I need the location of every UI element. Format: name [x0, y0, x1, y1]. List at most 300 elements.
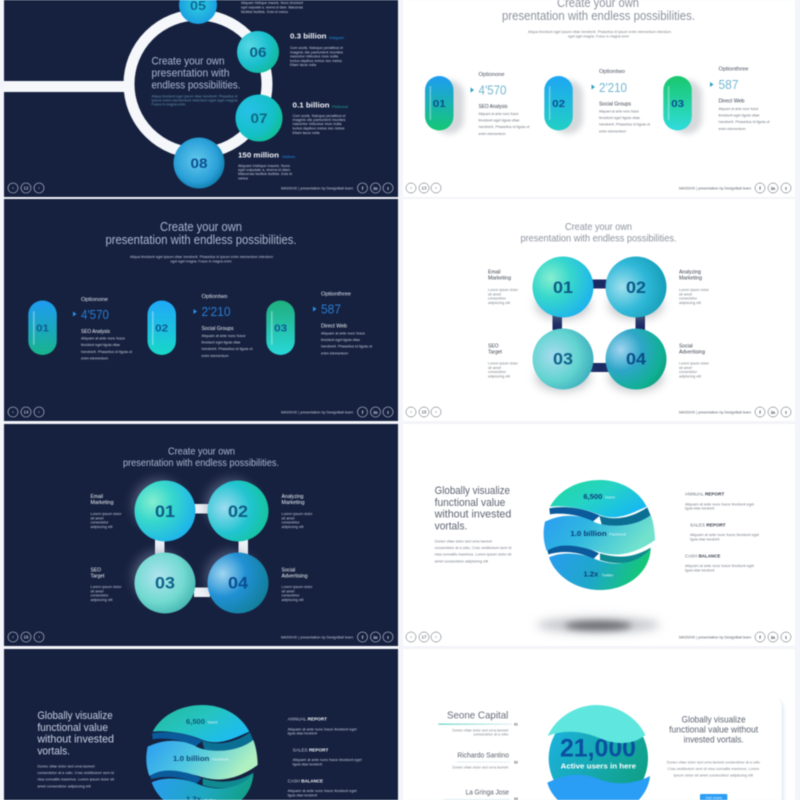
sales report: Aliquam at ante nunc fusce tincidunt eget — [293, 757, 363, 762]
card: invested vortals. — [684, 734, 744, 744]
label: social advertising: consectetur — [679, 370, 698, 374]
floating shadow — [537, 617, 660, 633]
card: functional value without — [669, 725, 759, 735]
card — [640, 697, 784, 800]
heading: functional value — [37, 722, 108, 734]
panel: wave globe (white) — [403, 424, 795, 646]
option three: tincidunt eget ligula vitae — [718, 113, 760, 117]
footer: navigation and social: › — [38, 410, 40, 414]
heading: presentation with endless possibilities. — [520, 232, 676, 244]
cash balance — [288, 778, 358, 797]
sub heading: Aliqua tincidunt eget ipsum vitae hendrerit. Phasellus id ipsum enim elementum interdum — [130, 255, 273, 259]
footer: navigation and social: MASSIVE | presentation by DesignBall team — [281, 636, 353, 640]
heading: functional value — [435, 497, 505, 509]
footer: navigation and social: t — [785, 186, 787, 191]
pill 01: 01 — [36, 324, 50, 334]
option one: Aliquam at ante nunc fusce — [478, 112, 518, 116]
cash balance: CASH BALANCE — [685, 553, 721, 559]
ring connector — [4, 15, 267, 153]
label: social advertising — [282, 568, 313, 602]
wave globe — [146, 705, 258, 800]
pill 03 — [266, 300, 295, 355]
entry: seone capital: Donec vitae dolor sed urna laoreet — [452, 727, 509, 732]
sales report — [293, 747, 363, 766]
body text: amet consectetur adipiscing elit — [37, 783, 92, 788]
label: analyzing marketing: Lorem ipsum dolor — [282, 512, 313, 516]
sales report: SALES REPORT — [690, 522, 726, 528]
heading — [106, 219, 296, 247]
annual report — [288, 717, 358, 736]
sphere 08: 08 — [190, 156, 208, 171]
option two: Aliquam at ante nunc fusce — [599, 110, 639, 114]
sphere 04: 04 — [626, 350, 647, 368]
footer: navigation and social: in — [771, 635, 775, 640]
annual report: ligula vitae hendrerit — [685, 506, 715, 511]
cash balance — [685, 553, 755, 572]
footer: navigation and social: f — [759, 186, 761, 191]
callout 05 text: eget vulputate a, viverra id diam. Maecenas — [241, 4, 303, 10]
ring description: Aliqua tincidunt eget ipsum vitae hendrerit. Phasellus id — [152, 94, 238, 98]
heading — [36, 710, 114, 758]
label: email marketing: Email — [90, 494, 103, 500]
ring heading: presentation with — [152, 68, 230, 80]
callout 05 text — [241, 0, 304, 14]
annual report: ANNUAL REPORT — [685, 492, 724, 498]
option two: Social Groups — [599, 102, 632, 108]
wave globe: Search — [208, 721, 218, 725]
entry: richardo santino — [452, 750, 518, 770]
label: seo target: Target — [488, 350, 503, 356]
body text: consectetur at a odio. Cras vestibulum sem id — [435, 545, 511, 550]
panel: pills (navy) — [4, 199, 398, 421]
heading — [123, 446, 279, 469]
wave sphere: Active users in here — [561, 761, 636, 770]
heading: Globally visualize — [435, 485, 510, 497]
body text: Donec vitae dolor sed urna laoreet — [37, 763, 95, 768]
callout 07: 0.1 billion — [292, 100, 330, 110]
annual report: ligula vitae hendrerit — [288, 731, 318, 736]
panel: active users (white) — [403, 649, 795, 800]
sphere 06 — [237, 31, 279, 73]
annual report: Aliquam at ante nunc fusce tincidunt eget — [288, 726, 358, 731]
callout 08: Visitors — [282, 155, 295, 159]
option three: 587 — [321, 302, 341, 316]
pill 03: 03 — [274, 324, 288, 334]
sphere 03 — [134, 552, 196, 614]
wave sphere: 21,000 — [560, 736, 636, 763]
entry: richardo santino: 02 — [514, 760, 518, 764]
sphere 02: 02 — [228, 503, 248, 521]
label: email marketing — [90, 494, 122, 529]
label: email marketing: sit amet — [90, 516, 104, 520]
heading: vortals. — [37, 746, 70, 758]
sphere 01: 01 — [553, 279, 573, 297]
pill 03 — [663, 76, 702, 134]
sphere 03: 03 — [155, 574, 175, 592]
footer: navigation and social: 15 — [421, 410, 427, 414]
footer: navigation and social: MASSIVE | presentation by DesignBall team — [679, 410, 751, 414]
label: seo target: consectetur — [488, 370, 507, 374]
option one: tincidunt eget ligula vitae — [81, 343, 120, 347]
entry: richardo santino: Donec vitae dolor sed urna laoreet — [452, 765, 509, 770]
wave globe: Facebook — [212, 758, 229, 762]
entry: seone capital — [438, 710, 518, 737]
pill 02 — [148, 300, 176, 355]
ring description: Fusce in magna enim — [152, 102, 186, 106]
option three: Direct Web — [321, 324, 347, 330]
callout 07: magnis dis parturient montes — [292, 117, 346, 122]
label: analyzing marketing: Marketing — [282, 500, 305, 506]
heading: Create your own — [160, 219, 242, 234]
footer: navigation and social: 13 — [421, 186, 427, 190]
heading — [520, 221, 676, 244]
option one: Optionone — [81, 297, 108, 303]
sphere glows — [132, 478, 257, 602]
ring heading — [152, 56, 240, 92]
sales report: SALES REPORT — [293, 747, 328, 753]
entry: seone capital: consectetur at a odio — [473, 732, 509, 737]
heading: Globally visualize — [37, 710, 113, 722]
heading: Create your own — [168, 446, 235, 458]
option three: Aliquam at ante nunc fusce — [321, 332, 365, 336]
sales report: ligula vitae hendrerit — [293, 761, 323, 766]
ring description: ipsum enim elementum interdum eget eget magna — [152, 98, 238, 102]
entry: la gringa jose — [443, 788, 518, 800]
footer: navigation and social: ‹ — [410, 410, 412, 414]
pill 02: 02 — [155, 324, 169, 334]
footer: navigation and social: 12 — [23, 186, 29, 190]
body text: nisa convallis maximus. Lorem ipsum dolor sit — [435, 552, 512, 557]
footer: navigation and social — [406, 632, 791, 642]
annual report: ANNUAL REPORT — [288, 717, 327, 723]
option three: enim elementum — [321, 352, 348, 356]
label: analyzing marketing: adipiscing elit — [679, 301, 702, 305]
body text: consectetur at a odio. Cras vestibulum sem id — [37, 770, 114, 775]
label: seo target — [90, 568, 122, 602]
connectors — [155, 504, 248, 597]
footer: navigation and social: t — [785, 410, 787, 415]
label: analyzing marketing: Analyzing — [282, 494, 304, 500]
option one: hendrerit. Phasellus id ligula ut — [478, 125, 530, 129]
footer: navigation and social: ‹ — [12, 410, 14, 414]
sphere 01 — [134, 480, 196, 542]
label: seo target: sit amet — [488, 366, 502, 370]
cash balance: Aliquam at ante nunc fusce tincidunt eget — [685, 563, 755, 568]
label: email marketing: Marketing — [488, 276, 511, 282]
option one: SEO Analysis — [81, 329, 110, 335]
pill 02: 02 — [552, 99, 566, 110]
footer: navigation and social: ‹ — [410, 186, 412, 190]
option three: Optionthree — [321, 292, 351, 298]
footer: navigation and social: f — [759, 410, 761, 415]
footer: navigation and social: in — [771, 186, 775, 191]
callout 07: nascetur ridiculus mus nulla — [292, 121, 342, 126]
heading — [434, 485, 511, 533]
option three — [710, 66, 770, 131]
label: social advertising: Lorem ipsum dolor — [679, 362, 710, 366]
label: analyzing marketing: Lorem ipsum dolor — [679, 288, 710, 292]
heading: presentation with endless possibilities. — [502, 8, 695, 23]
callout 08: varius — [238, 176, 248, 180]
option one: enim elementum — [81, 356, 108, 360]
footer: navigation and social: in — [374, 635, 378, 640]
callout 08 — [238, 150, 295, 180]
callout 07: Etiam lacus nulla — [292, 130, 320, 135]
label: analyzing marketing: sit amet — [282, 516, 295, 520]
sales report: ligula vitae hendrerit — [690, 536, 720, 541]
wave globe: 1.0 billion — [570, 531, 607, 538]
body text: nisa convallis maximus. Lorem ipsum dolor sit — [37, 777, 115, 782]
entry: seone capital: 01 — [514, 722, 518, 726]
footer: navigation and social: in — [771, 410, 775, 415]
sub heading: Aliqua tincidunt eget ipsum vitae hendrerit. Phasellus id ipsum enim elementum interdum — [528, 30, 671, 34]
footer: navigation and social: t — [387, 635, 389, 640]
panel: four spheres (white) — [403, 199, 795, 421]
label: analyzing marketing: consectetur — [679, 297, 698, 301]
option two: Aliquam at ante nunc fusce — [202, 334, 246, 338]
sphere 01 — [532, 256, 594, 318]
label: social advertising: Advertising — [282, 574, 308, 580]
label: email marketing: Marketing — [90, 500, 114, 506]
heading: without invested — [36, 734, 114, 746]
label: social advertising — [679, 344, 710, 378]
option one: hendrerit. Phasellus id ligula ut — [81, 350, 133, 354]
button: Get more — [705, 795, 723, 800]
footer: navigation and social: 17 — [421, 634, 427, 640]
footer: navigation and social: MASSIVE | presentation by DesignBall team — [281, 410, 353, 414]
panel: timeline ring (navy) — [4, 0, 398, 197]
option one: 4'570 — [81, 308, 109, 322]
footer: navigation and social: f — [759, 635, 761, 640]
wave globe: 1.0 billion — [173, 756, 209, 763]
heading — [502, 0, 695, 23]
footer: navigation and social: › — [38, 634, 40, 640]
wave globe: 6,500 — [583, 494, 602, 501]
option two: hendrerit. Phasellus id ligula ut — [202, 347, 253, 351]
option three: hendrerit. Phasellus id ligula ut — [321, 345, 373, 349]
sales report — [690, 522, 760, 541]
label: social advertising: Social — [282, 568, 295, 574]
sphere 08 — [174, 138, 224, 188]
sphere 06: 06 — [250, 45, 267, 60]
sphere 04 — [208, 552, 268, 614]
option one: Aliquam at ante nunc fusce — [81, 336, 125, 340]
body text — [37, 763, 115, 788]
callout 08: Maecenas facilisis facilisis. Duis id — [238, 171, 292, 176]
footer: navigation and social: › — [435, 186, 437, 190]
wave globe: 6,500 — [186, 719, 205, 726]
entry: richardo santino: Richardo Santino — [457, 750, 509, 759]
option two: enim elementum — [202, 354, 228, 358]
callout 06: Instagram — [329, 36, 344, 40]
label: seo target: adipiscing elit — [488, 374, 511, 378]
footer: navigation and social: ‹ — [410, 634, 412, 640]
label: seo target: SEO — [488, 344, 499, 350]
cash balance: ligula vitae hendrerit — [288, 792, 318, 797]
callout 06: 0.3 billion — [290, 32, 327, 40]
label: social advertising: Social — [679, 344, 693, 350]
sales report: Aliquam at ante nunc fusce tincidunt eget — [690, 532, 760, 537]
heading: presentation with endless possibilities. — [123, 457, 279, 469]
label: social advertising: consectetur — [282, 594, 300, 598]
body text — [435, 538, 512, 563]
footer: navigation and social: ‹ — [12, 186, 14, 190]
footer: navigation and social: f — [362, 635, 364, 640]
body text: Donec vitae dolor sed urna laoreet — [435, 538, 493, 543]
card: Cras vestibulum sem id nisa convallis maximus. Lorem — [667, 766, 760, 771]
label: analyzing marketing — [679, 270, 710, 305]
footer: navigation and social: › — [435, 634, 437, 640]
annual report — [685, 492, 755, 511]
label: email marketing: adipiscing elit — [90, 525, 113, 529]
callout 08: 150 million — [238, 150, 280, 160]
connectors — [552, 280, 645, 372]
option two: tincidunt eget ligula vitae — [599, 116, 640, 120]
label: email marketing: Lorem ipsum dolor — [90, 512, 122, 516]
option one: SEO Analysis — [478, 104, 508, 110]
label: email marketing — [488, 270, 519, 305]
pill 01: 01 — [433, 99, 446, 110]
callout 08: eget vulputate a, viverra id diam — [238, 167, 291, 172]
heading: Create your own — [565, 221, 632, 233]
footer: navigation and social: f — [362, 186, 364, 191]
label: seo target: SEO — [90, 568, 101, 574]
label: email marketing: Lorem ipsum dolor — [488, 288, 519, 292]
footer: navigation and social: MASSIVE | presentation by DesignBall team — [679, 636, 751, 640]
pill 02 — [544, 76, 583, 134]
sphere 02: 02 — [626, 279, 646, 297]
footer: navigation and social: ‹ — [12, 634, 14, 640]
footer: navigation and social: in — [374, 186, 378, 191]
sphere shadows — [536, 291, 663, 391]
label: analyzing marketing: adipiscing elit — [282, 525, 304, 529]
pill 03: 03 — [671, 99, 685, 110]
option two — [194, 294, 253, 358]
callout 05 text: facilisis facilisis. Duis id varius — [241, 9, 288, 14]
sphere 02 — [208, 480, 268, 542]
callout 06: Etiam lacus nulla — [290, 62, 317, 67]
annual report: Aliquam at ante nunc fusce tincidunt eget — [685, 501, 755, 506]
label: email marketing: consectetur — [488, 297, 507, 301]
card: ipsum dolor sit amet consectetur adipiscing elit — [674, 773, 754, 778]
callout 06: Cum sociis. Natoque penatibus et — [290, 45, 344, 50]
panel: four spheres (navy) — [4, 424, 398, 646]
footer: navigation and social — [406, 407, 791, 417]
footer: navigation and social: t — [785, 635, 787, 640]
heading: presentation with endless possibilities. — [106, 232, 296, 247]
sphere 04: 04 — [228, 574, 249, 592]
label: email marketing: consectetur — [90, 521, 109, 525]
footer: navigation and social: t — [387, 186, 389, 191]
option two: Optiontwo — [202, 294, 228, 300]
option two: tincidunt eget ligula vitae — [202, 340, 240, 344]
footer: navigation and social: in — [374, 410, 378, 415]
option three: Aliquam at ante nunc fusce — [718, 107, 758, 111]
sphere 03 — [532, 328, 594, 390]
option two: enim elementum — [599, 130, 626, 134]
option one — [470, 72, 530, 136]
option two: 2'210 — [599, 81, 627, 95]
heading: vortals. — [435, 521, 467, 533]
panel: wave globe (navy) — [4, 649, 398, 800]
footer: navigation and social: › — [38, 186, 40, 190]
sphere 03: 03 — [553, 350, 573, 368]
option two: 2'210 — [202, 305, 231, 319]
footer: navigation and social — [8, 632, 393, 642]
cash balance: Aliquam at ante nunc fusce tincidunt eget — [288, 788, 358, 793]
callout 07 — [292, 100, 348, 135]
label: analyzing marketing — [282, 494, 313, 529]
callout 06: magnis dis parturient montes — [290, 49, 343, 54]
option one: tincidunt eget ligula vitae — [478, 118, 520, 122]
callout 08: Aliquam tristique mauris. Nunc — [238, 163, 290, 168]
wave globe: Search — [605, 496, 615, 500]
callout 05 text: Aliquam tristique mauris. Nunc tincidunt — [241, 0, 304, 5]
entry: la gringa jose: La Gringa Jose — [466, 788, 509, 797]
card: Globally visualize — [682, 715, 746, 725]
option one: Optionone — [478, 72, 505, 78]
sub heading: eget eget magna. Fusce in magna enim — [170, 259, 232, 263]
cash balance: ligula vitae hendrerit — [685, 567, 715, 572]
wave globe: Facebook — [609, 533, 626, 537]
sphere 07 — [236, 94, 282, 142]
option two — [592, 69, 651, 134]
sphere 05 — [179, 0, 217, 24]
entry: seone capital: Seone Capital — [447, 710, 508, 721]
callout 06: luctus dapibus metus nec metus — [290, 58, 342, 63]
option three: hendrerit. Phasellus id ligula ut — [718, 120, 770, 124]
sub heading — [528, 30, 671, 38]
label: analyzing marketing: consectetur — [282, 521, 300, 525]
label: seo target: Lorem ipsum dolor — [488, 362, 519, 366]
footer: navigation and social — [8, 183, 393, 193]
footer: navigation and social — [8, 407, 393, 417]
option three — [313, 292, 373, 356]
option two: hendrerit. Phasellus id ligula ut — [599, 123, 651, 127]
sphere 04 — [606, 328, 666, 390]
label: social advertising: adipiscing elit — [282, 598, 304, 602]
footer: navigation and social: 16 — [23, 634, 29, 640]
label: analyzing marketing: Marketing — [679, 276, 702, 282]
callout 07: luctus dapibus metus nec metus — [292, 126, 344, 130]
sphere 01: 01 — [155, 503, 175, 521]
option three: tincidunt eget ligula vitae — [321, 338, 360, 342]
option two: Social Groups — [202, 326, 234, 332]
footer: navigation and social — [406, 183, 791, 193]
footer: navigation and social: MASSIVE | presentation by DesignBall team — [281, 186, 353, 190]
label: seo target: Lorem ipsum dolor — [90, 585, 122, 589]
panel: pills (white) — [403, 0, 795, 197]
card: Donec vitae dolor sed urna laoreet consectetur at a odio — [667, 759, 761, 764]
label: seo target: consectetur — [90, 594, 109, 598]
option three: 587 — [718, 78, 739, 92]
label: seo target: Target — [90, 574, 105, 580]
label: seo target: adipiscing elit — [90, 598, 113, 602]
option three: Optionthree — [718, 66, 749, 72]
sub heading: eget eget magna. Fusce in magna enim — [568, 34, 629, 38]
wave globe — [544, 480, 655, 590]
heading: without invested — [434, 509, 511, 521]
pill 01 — [28, 300, 57, 355]
wave sphere — [547, 705, 650, 800]
label: analyzing marketing: sit amet — [679, 292, 693, 296]
label: social advertising: sit amet — [679, 366, 693, 370]
footer: navigation and social: MASSIVE | presentation by DesignBall team — [679, 186, 751, 190]
option one: 4'570 — [478, 84, 507, 98]
footer: navigation and social: 14 — [23, 410, 29, 414]
label: seo target: sit amet — [90, 589, 104, 593]
label: social advertising: Lorem ipsum dolor — [282, 585, 313, 589]
